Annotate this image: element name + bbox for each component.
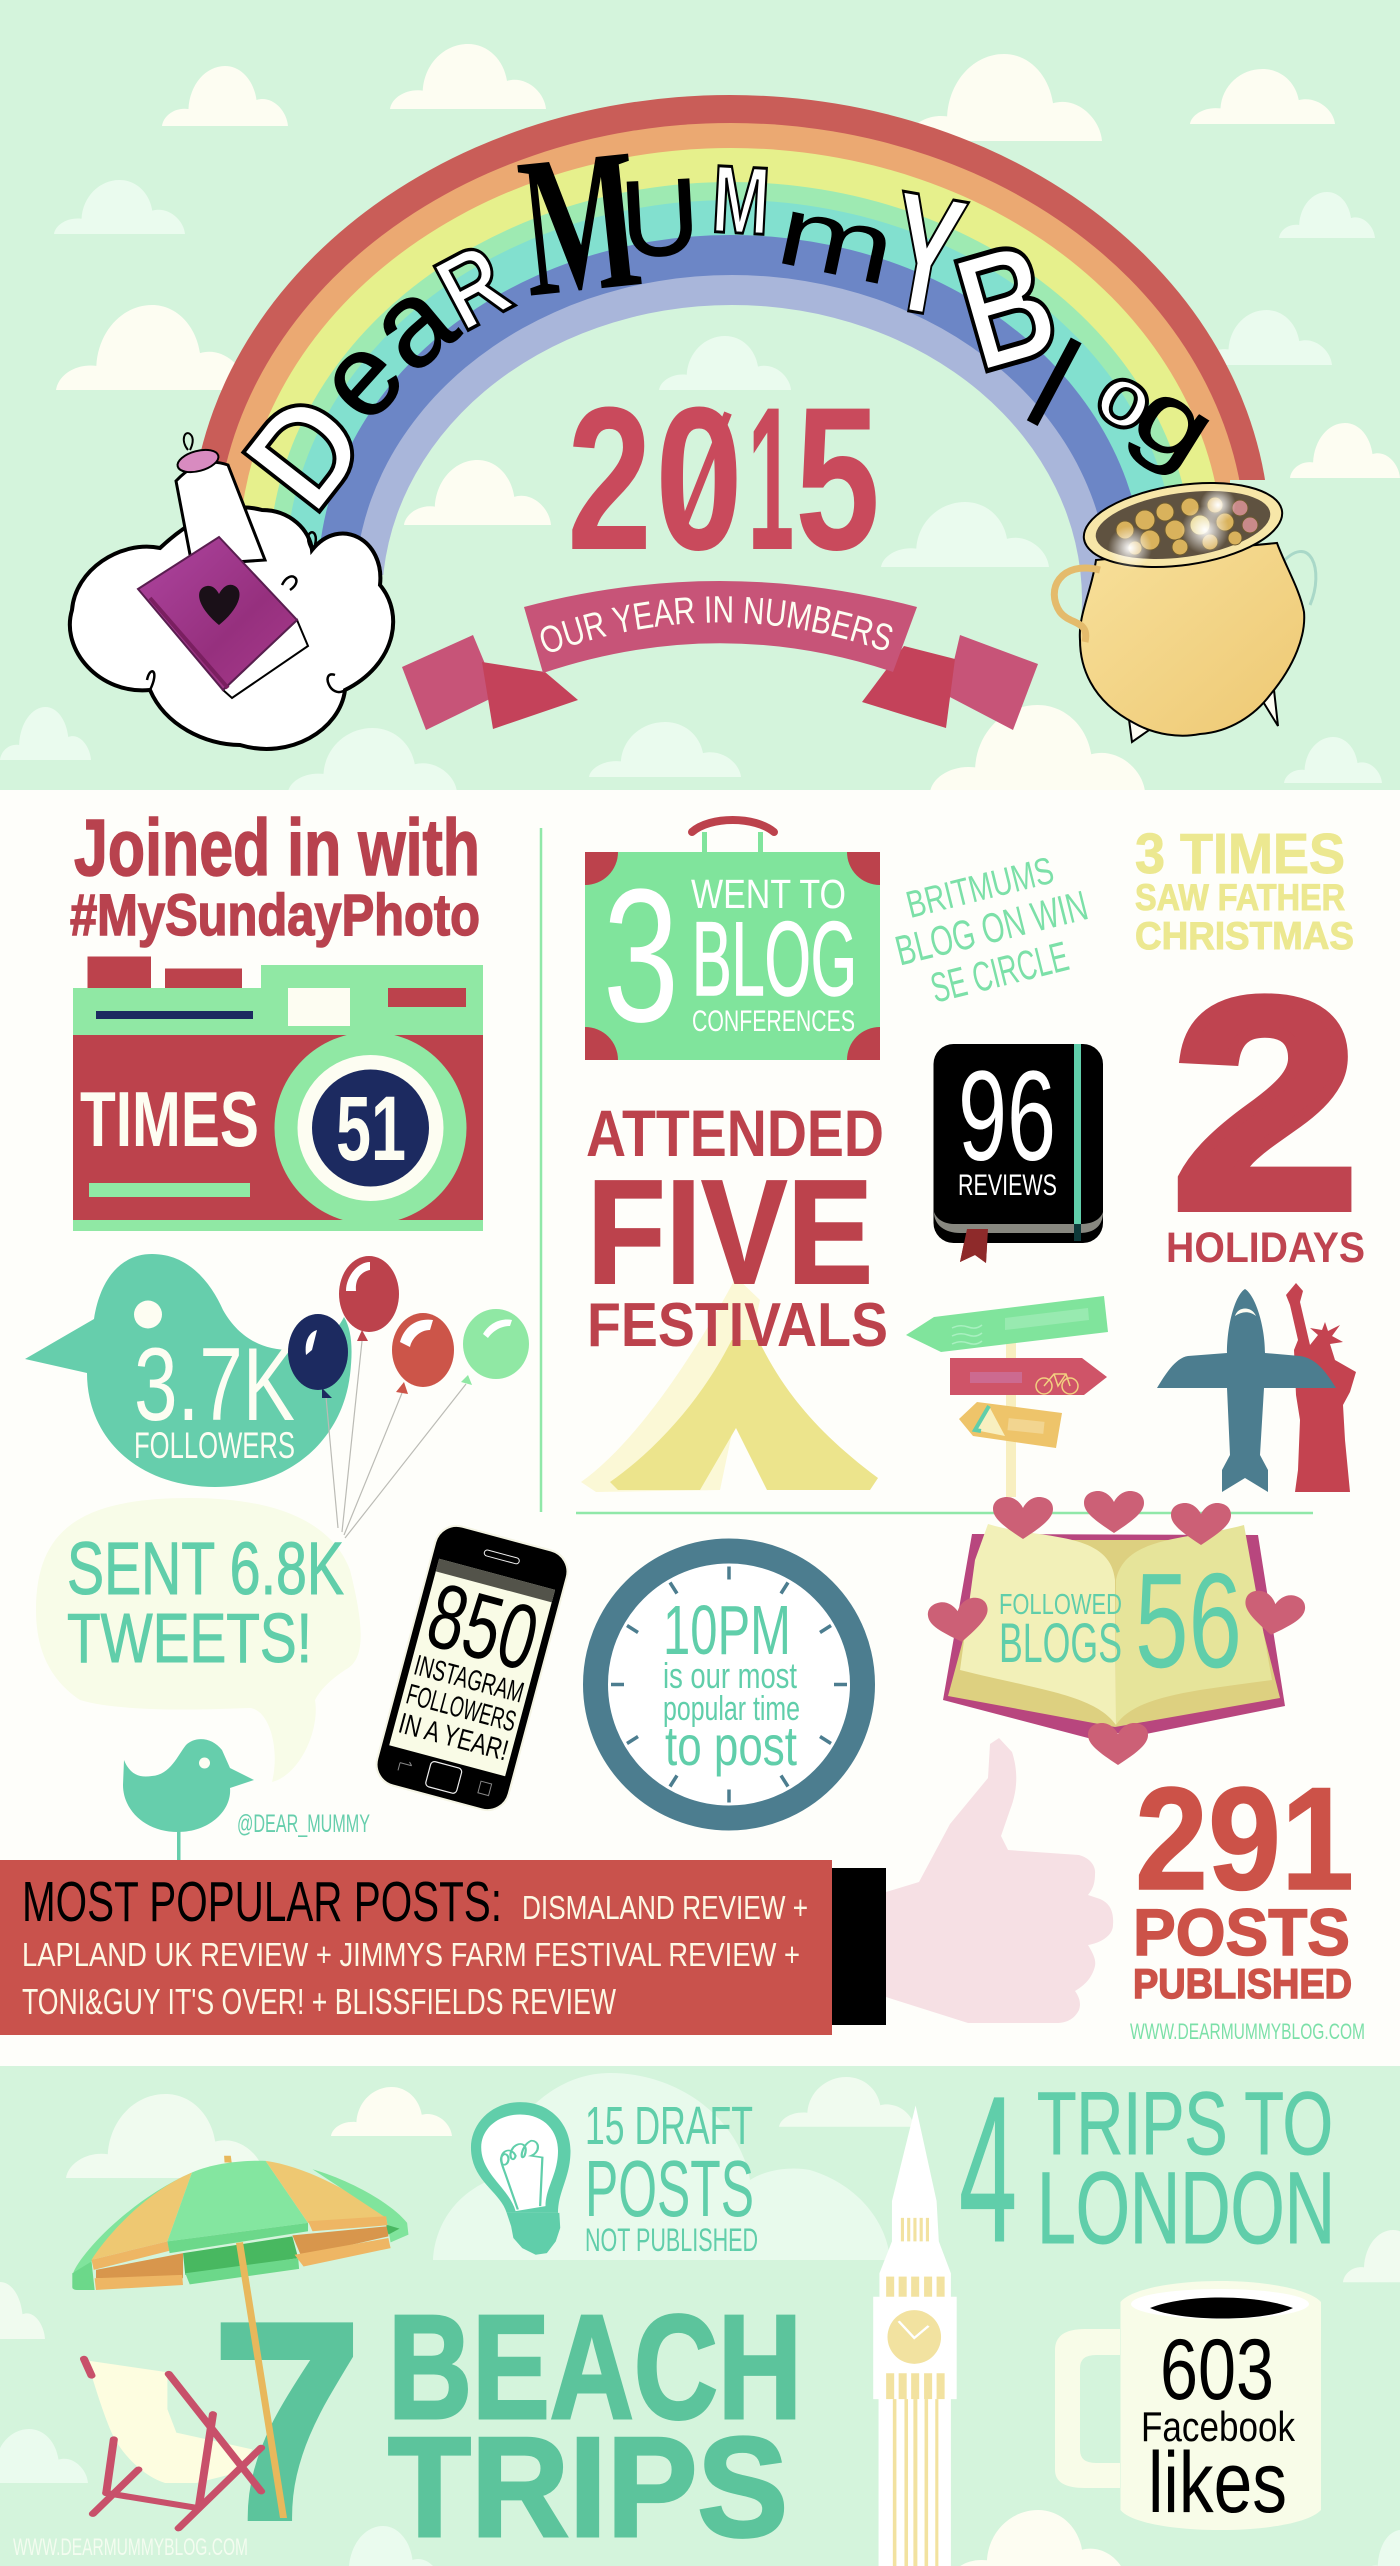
title: Dear Mummy Blog: Y <box>875 154 977 354</box>
icon: suitcase 3 went to blog conferences <box>585 820 880 1062</box>
text: 3 times saw father christmas: CHRISTMAS <box>1135 915 1354 958</box>
icon: mug 603 facebook likes: Facebook <box>1141 2403 1296 2450</box>
background clouds inside rainbow <box>404 336 1049 567</box>
text: britmums blog on win se circle: BLOG ON WIN <box>891 881 1092 974</box>
text: 4 trips to london: 4 <box>959 2054 1017 2286</box>
icon: camera showing 51 times: 51 <box>336 1078 406 1180</box>
big number 2 holidays: 2 <box>1173 938 1358 1269</box>
text: 3 times saw father christmas: SAW FATHER <box>1135 877 1345 918</box>
band: most popular posts <box>0 1860 832 2035</box>
icon: light bulb <box>471 2102 570 2255</box>
icon: tent <box>581 1277 878 1492</box>
icon: notebook 96 reviews <box>934 1044 1103 1263</box>
icon: cloud with bottle and book <box>70 433 393 749</box>
title: Dear Mummy Blog: D <box>214 365 396 537</box>
banner: our year in numbers: OUR YEAR IN NUMBERS <box>540 596 892 652</box>
icon: purple book with heart <box>138 537 308 698</box>
icon: phone 850 instagram followers: FOLLOWERS <box>403 1679 519 1739</box>
text: 4 trips to london <box>959 2054 1335 2286</box>
icon: open book followed 56 blogs with hearts: FOLLOWED <box>999 1589 1122 1621</box>
icon: camera showing 51 times: TIMES <box>80 1075 259 1163</box>
heading: joined in with MySundayPhoto <box>70 803 480 948</box>
icon: twitter bird 3.7K followers <box>25 1254 352 1487</box>
panel: header <box>0 0 1400 790</box>
big number 2 holidays: HOLIDAYS <box>1166 1224 1365 1272</box>
title: Dear Mummy Blog: B <box>938 205 1075 407</box>
icon: thumbs up hand <box>832 1738 1113 2025</box>
text: 15 draft posts not published <box>585 2096 758 2258</box>
text: 3 times saw father christmas: 3 TIMES <box>1135 822 1345 886</box>
icon: twitter bird 3.7K followers: 3.7K <box>134 1327 295 1443</box>
icon: small bird with handle <box>123 1739 370 1861</box>
text: attended five festivals: FESTIVALS <box>587 1291 888 1360</box>
icon: umbrella pole <box>236 2242 287 2518</box>
icon: signpost <box>906 1296 1108 1497</box>
text: 15 draft posts not published: NOT PUBLISHED <box>585 2222 758 2258</box>
text: 291 posts published: PUBLISHED <box>1133 1960 1352 2007</box>
text: footer website url: WWW.DEARMUMMYBLOG.COM <box>13 2534 248 2561</box>
number 7 beach trips: BEACH <box>388 2285 802 2450</box>
icon: small bird with handle: @DEAR_MUMMY <box>237 1810 370 1838</box>
year: 2015: 1 <box>748 365 794 593</box>
title: Dear Mummy Blog: o <box>1080 344 1172 452</box>
icon: clock 10pm most popular time: 10PM <box>663 1591 791 1669</box>
number 7 beach trips <box>212 2266 802 2566</box>
icon: phone 850 instagram followers <box>372 1521 572 1815</box>
band: most popular posts: MOST POPULAR POSTS: <box>22 1870 502 1934</box>
title: Dear Mummy Blog: e <box>291 311 429 444</box>
banner: our year in numbers <box>402 581 1038 730</box>
panel: footer <box>0 2054 1400 2566</box>
icon: clock 10pm most popular time: is our most <box>663 1655 797 1696</box>
icon: baby bottle <box>175 433 265 565</box>
icon: camera showing 51 times <box>73 956 483 1231</box>
text: 291 posts published: POSTS <box>1133 1895 1350 1969</box>
icon: suitcase 3 went to blog conferences: WENT TO <box>691 871 846 917</box>
icon: notebook 96 reviews: 96 <box>958 1045 1056 1188</box>
footer background clouds <box>0 2073 1400 2566</box>
panel: body <box>0 790 1400 2066</box>
text: 15 draft posts not published: 15 DRAFT <box>585 2096 753 2156</box>
speech bubble: sent 6.8k tweets <box>36 1498 361 1782</box>
band: most popular posts: DISMALAND REVIEW + <box>522 1889 808 1926</box>
text: 291 posts published: 291 <box>1135 1757 1354 1920</box>
icon: phone 850 instagram followers: IN A YEAR! <box>395 1708 512 1767</box>
pot coins <box>1116 497 1258 555</box>
year: 2015: 2 <box>567 365 652 593</box>
year: 2015: 0 <box>655 365 743 593</box>
icon: clock 10pm most popular time <box>596 1551 862 1818</box>
icon: clock 10pm most popular time: to post <box>665 1714 797 1777</box>
icon: clock 10pm most popular time: popular time <box>663 1690 800 1728</box>
icon: big ben <box>873 2105 957 2566</box>
icon: balloons <box>288 1256 529 1538</box>
title: Dear Mummy Blog: m <box>768 173 905 306</box>
text: britmums blog on win se circle: SE CIRCLE <box>926 932 1073 1012</box>
speech bubble: sent 6.8k tweets: SENT 6.8K <box>67 1527 344 1610</box>
icon: phone 850 instagram followers: 850 <box>418 1564 548 1691</box>
year: 2015 <box>567 365 880 593</box>
icon: mug 603 facebook likes: likes <box>1148 2435 1287 2531</box>
icon: twitter bird 3.7K followers: FOLLOWERS <box>134 1425 295 1466</box>
band: most popular posts: TONI&GUY IT'S OVER! + BLISSFIELDS REVIEW <box>22 1981 616 2022</box>
icon: beach umbrella <box>72 2156 408 2290</box>
title: Dear Mummy Blog: a <box>342 251 480 396</box>
icon: suitcase 3 went to blog conferences: 3 <box>603 850 679 1062</box>
title: Dear Mummy Blog: g <box>1115 355 1236 488</box>
text: 3 times saw father christmas <box>1135 822 1354 958</box>
icon: notebook 96 reviews: REVIEWS <box>958 1169 1057 1202</box>
icon: deck chair <box>84 2359 261 2528</box>
icon: suitcase 3 went to blog conferences: BLOG <box>692 901 857 1018</box>
text: britmums blog on win se circle <box>891 850 1092 1012</box>
year: 2015: 5 <box>795 365 880 593</box>
icon: plane and statue of liberty <box>1157 1283 1356 1492</box>
text: attended five festivals <box>586 1096 888 1360</box>
title: Dear Mummy Blog: l <box>1007 314 1099 454</box>
icon: open book followed 56 blogs with hearts <box>926 1491 1307 1765</box>
icon: suitcase 3 went to blog conferences: CONFERENCES <box>692 1005 855 1038</box>
title: Dear Mummy Blog: R <box>419 221 528 353</box>
icon: open book followed 56 blogs with hearts: BLOGS <box>999 1611 1122 1674</box>
title: Dear Mummy Blog <box>214 107 1236 537</box>
hearts around book <box>926 1491 1307 1765</box>
title: Dear Mummy Blog: M <box>510 107 650 339</box>
heading: joined in with MySundayPhoto: Joined in with <box>74 803 480 892</box>
icon: open book followed 56 blogs with hearts: 56 <box>1135 1545 1242 1696</box>
text: 291 posts published <box>1133 1757 1354 2007</box>
heading: joined in with MySundayPhoto: #MySundayPhoto <box>70 883 480 948</box>
band: most popular posts: LAPLAND UK REVIEW + JIMMYS FARM FESTIVAL REVIEW + <box>22 1936 800 1973</box>
speech bubble: sent 6.8k tweets: TWEETS! <box>67 1599 312 1677</box>
text: attended five festivals: FIVE <box>587 1150 873 1315</box>
number 7 beach trips: TRIPS <box>388 2408 788 2566</box>
text: attended five festivals: ATTENDED <box>586 1096 884 1170</box>
rainbow <box>201 95 1265 640</box>
icon: mug 603 facebook likes: 603 <box>1160 2322 1274 2418</box>
title: Dear Mummy Blog: M <box>709 144 773 255</box>
text: britmums blog on win se circle: BRITMUMS <box>902 850 1058 927</box>
icon: phone 850 instagram followers: INSTAGRAM <box>411 1650 527 1710</box>
title: Dear Mummy Blog: U <box>618 155 702 280</box>
text: 15 draft posts not published: POSTS <box>585 2144 754 2233</box>
background clouds behind rainbow <box>0 44 1400 792</box>
icon: mug 603 facebook likes <box>1055 2281 1321 2531</box>
icon: pot of gold <box>1054 471 1316 742</box>
